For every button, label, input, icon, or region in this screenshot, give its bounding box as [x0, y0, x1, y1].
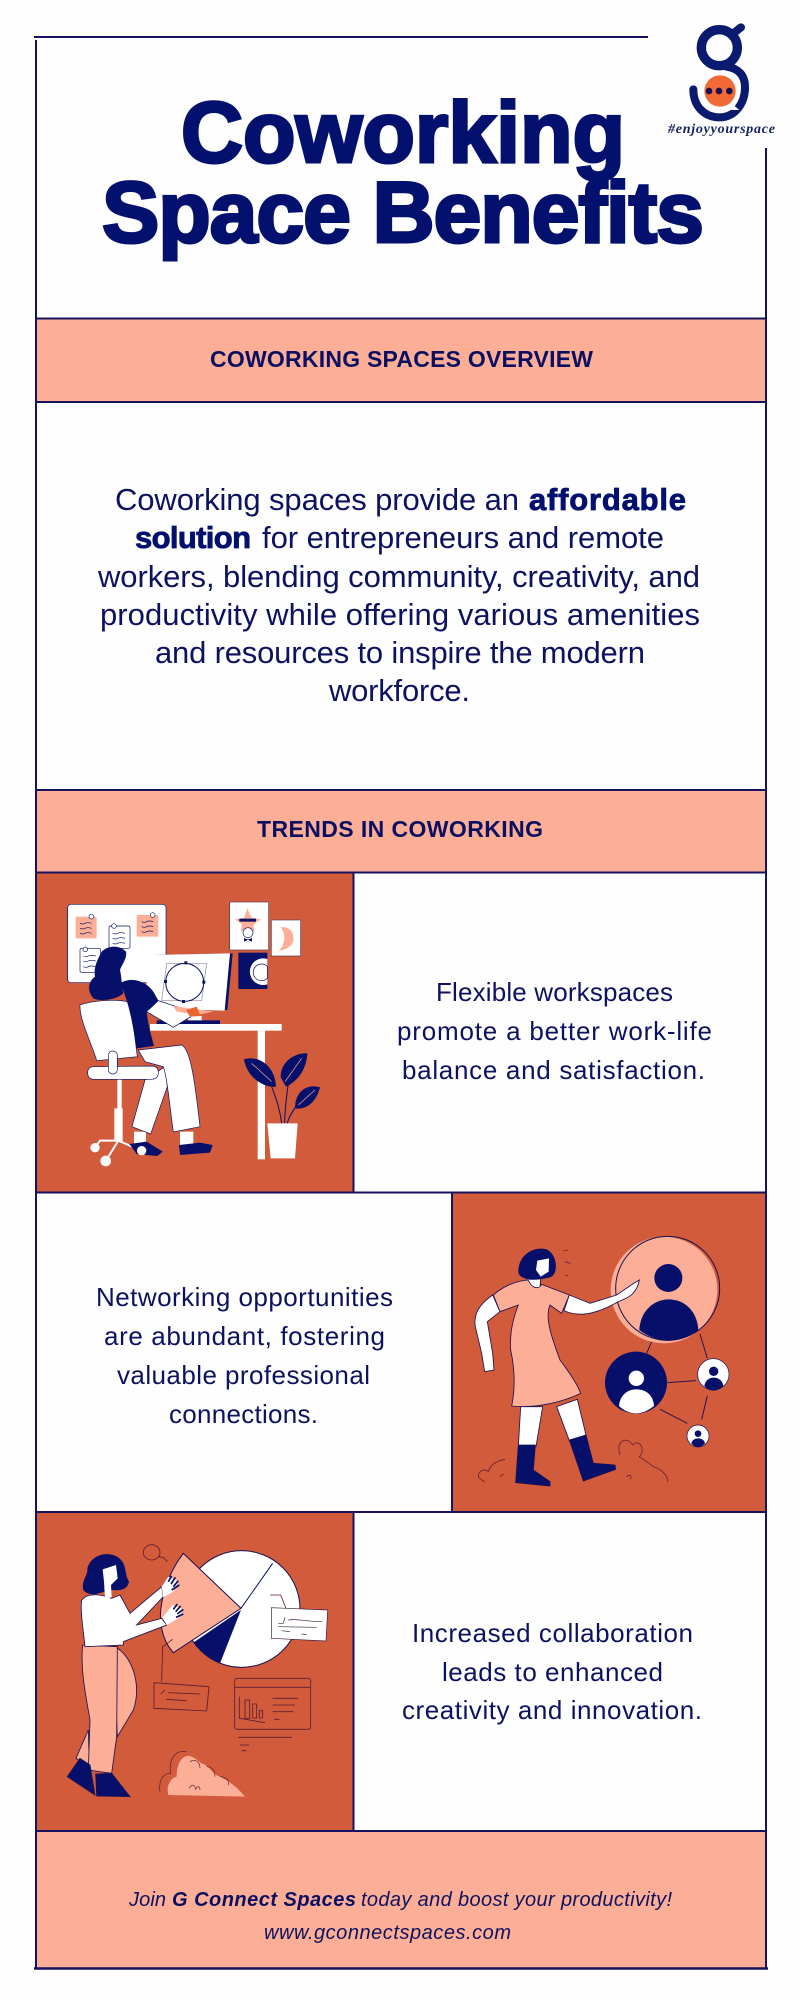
text block: flexible workspaces: Flexible workspaces — [436, 977, 673, 1007]
text block: overview paragraph: workforce. — [328, 673, 470, 708]
text block: networking opportunities: are abundant, fostering — [104, 1321, 385, 1351]
tiny profile circle — [687, 1425, 709, 1447]
illustration: woman assembling a pie chart — [36, 1513, 353, 1832]
woman — [475, 1249, 639, 1486]
shoes — [129, 1142, 213, 1156]
text block: increased collaboration: creativity and innovation. — [402, 1695, 702, 1725]
footer tagline: Join — [128, 1889, 166, 1911]
heading: trends in coworking: TRENDS IN COWORKING — [257, 816, 543, 842]
text block: overview paragraph: solution — [135, 520, 251, 555]
text block: increased collaboration: Increased collaboration — [412, 1618, 693, 1648]
logo speech bubble — [704, 75, 736, 107]
text block: overview paragraph: and resources to inspire the modern — [155, 635, 645, 670]
plant — [244, 1053, 320, 1158]
posters — [230, 902, 301, 989]
text block: overview paragraph: Coworking spaces provide an — [115, 482, 519, 517]
footer website: www.gconnectspaces.com — [264, 1922, 511, 1944]
panel: footer call to action — [36, 1831, 766, 1968]
logo letter g — [693, 27, 745, 117]
woman torso and hair — [89, 947, 213, 1048]
title: Coworking — [181, 85, 625, 181]
text block: overview paragraph: workers, blending community, creativity, and — [97, 559, 700, 594]
callout card outline — [154, 1639, 209, 1711]
heading: coworking spaces overview: COWORKING SPACES OVERVIEW — [210, 346, 593, 372]
text block: networking opportunities: connections. — [169, 1399, 318, 1429]
trousers — [132, 1045, 200, 1146]
monitor — [144, 953, 233, 1011]
grass outlines — [478, 1250, 667, 1482]
pin board — [68, 904, 166, 983]
text block: networking opportunities: Networking opportunities — [96, 1282, 393, 1312]
text block: networking opportunities — [96, 1282, 393, 1429]
text block: overview paragraph — [97, 482, 700, 708]
woman — [67, 1554, 183, 1797]
panel: overview heading band — [36, 318, 766, 402]
illustration: woman pointing at network of people — [452, 1193, 766, 1512]
text block: increased collaboration: leads to enhanced — [442, 1657, 663, 1687]
desk — [150, 1016, 282, 1159]
small profile circle — [698, 1359, 729, 1391]
magnifier outline — [143, 1545, 167, 1562]
large profile circle — [611, 1236, 720, 1343]
text block: flexible workspaces: promote a better work-life — [397, 1016, 712, 1046]
medium profile circle — [605, 1352, 667, 1414]
text block: overview paragraph: for entrepreneurs and remote — [262, 520, 664, 555]
chair — [90, 1079, 142, 1166]
text block: increased collaboration — [402, 1618, 702, 1725]
panel: trends heading band — [36, 790, 766, 872]
text block: overview paragraph: affordable — [529, 482, 686, 517]
cloud — [160, 1751, 245, 1797]
panel: footer call to action: today and boost your productivity! — [361, 1889, 672, 1911]
illustration: woman working at desk — [36, 873, 353, 1193]
title — [102, 85, 704, 261]
text block: overview paragraph: productivity while offering various amenities — [100, 597, 700, 632]
logo: g connect spaces — [667, 27, 775, 137]
chair back and seat — [80, 1000, 158, 1079]
panel: footer call to action: G Connect Spaces — [172, 1889, 356, 1911]
text block: networking opportunities: valuable professional — [117, 1360, 370, 1390]
data card — [270, 1595, 328, 1641]
text block: flexible workspaces: balance and satisfaction. — [402, 1055, 705, 1085]
browser window chart outline — [235, 1678, 311, 1751]
logo hashtag: #enjoyyourspace — [667, 122, 775, 137]
text block: flexible workspaces — [397, 977, 712, 1085]
pie chart — [160, 1551, 300, 1667]
title: Space Benefits — [102, 165, 704, 261]
network connector lines — [647, 1334, 707, 1423]
